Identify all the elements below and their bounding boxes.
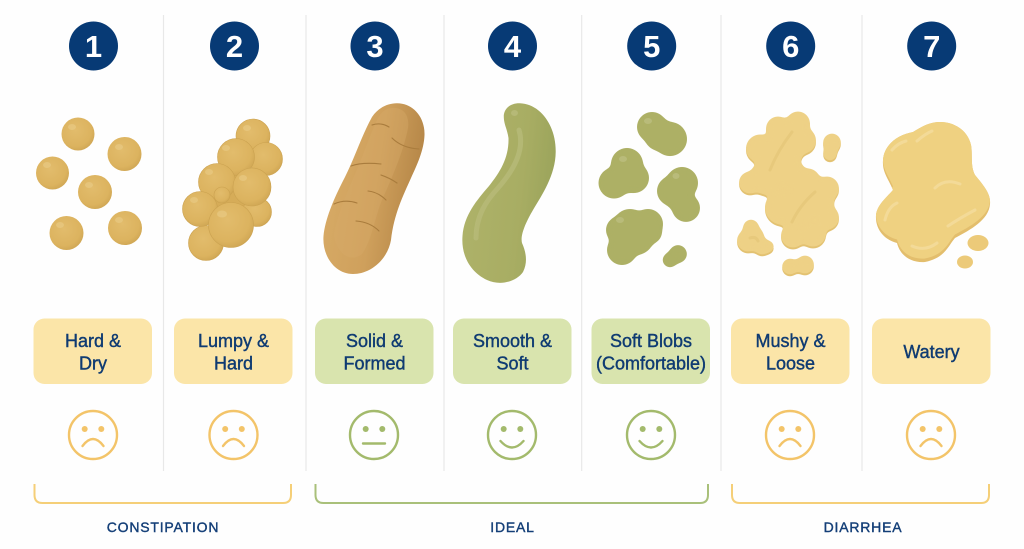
- icon: smiling face: [488, 411, 536, 459]
- illustration: formed sausage with cracks: [323, 103, 425, 274]
- number badge 4: 4: [504, 29, 522, 64]
- illustration: mushy fluffy pieces: [737, 112, 841, 276]
- number badge 5: 5: [643, 29, 660, 64]
- group: diarrhea bracket and label: [732, 484, 989, 535]
- number badge 3: [350, 22, 400, 70]
- number badge 5: [627, 22, 676, 70]
- group: constipation bracket and label: CONSTIPATION: [107, 519, 219, 535]
- label pill: Mushy & Loose: Loose: [766, 354, 815, 374]
- number badge 6: [766, 22, 815, 70]
- number badge 1: [69, 22, 118, 70]
- icon: sad face: [907, 411, 955, 459]
- number badge 2: 2: [226, 29, 243, 64]
- label pill: Solid & Formed: Solid &: [346, 331, 403, 351]
- label pill: Watery: [872, 318, 990, 384]
- label pill: Lumpy & Hard: [174, 318, 292, 384]
- number badge 7: [907, 22, 956, 70]
- illustration: smooth curved sausage: [462, 103, 556, 283]
- dividers between columns: [164, 15, 862, 471]
- panel: type 1: [34, 22, 152, 459]
- number badge 1: 1: [85, 29, 102, 64]
- number badge 7: 7: [923, 29, 940, 64]
- group: diarrhea bracket and label: DIARRHEA: [824, 519, 902, 535]
- label pill: Hard & Dry: Hard &: [65, 331, 121, 351]
- label pill: Solid & Formed: [315, 318, 434, 384]
- panel: type 7: [870, 22, 995, 459]
- label pill: Smooth & Soft: [453, 318, 572, 384]
- number badge 6: 6: [782, 29, 799, 64]
- label pill: Soft Blobs (Comfortable): (Comfortable): [596, 354, 706, 374]
- illustration: lumpy cluster: [182, 119, 282, 260]
- icon: smiling face: [627, 411, 675, 459]
- label pill: Soft Blobs (Comfortable): [592, 318, 710, 384]
- illustration: hard separate lumps: [36, 118, 142, 250]
- panel: type 2: [174, 22, 292, 459]
- icon: sad face: [210, 411, 258, 459]
- label pill: Lumpy & Hard: Lumpy &: [198, 331, 269, 351]
- icon: neutral face: [350, 411, 398, 459]
- group: ideal bracket and label: IDEAL: [490, 519, 535, 535]
- number badge 2: [210, 22, 259, 70]
- illustration: watery puddle: [876, 122, 990, 268]
- label pill: Smooth & Soft: Soft: [496, 354, 529, 374]
- illustration: soft blobs: [598, 112, 700, 268]
- label pill: Soft Blobs (Comfortable): Soft Blobs: [610, 331, 692, 351]
- label pill: Smooth & Soft: Smooth &: [473, 331, 552, 351]
- label pill: Mushy & Loose: Mushy &: [755, 331, 826, 351]
- icon: sad face: [766, 411, 814, 459]
- label pill: Solid & Formed: Formed: [343, 354, 406, 374]
- label pill: Hard & Dry: [34, 318, 152, 384]
- label pill: Hard & Dry: Dry: [79, 354, 107, 374]
- number badge 4: [488, 22, 537, 70]
- label pill: Watery: Watery: [903, 342, 960, 362]
- panel: type 3: [315, 22, 434, 459]
- number badge 3: 3: [366, 29, 384, 64]
- label pill: Lumpy & Hard: Hard: [214, 354, 253, 374]
- panel: type 6: [731, 22, 850, 459]
- label pill: Mushy & Loose: [731, 318, 850, 384]
- panel: type 4: [453, 22, 572, 459]
- icon: sad face: [69, 411, 117, 459]
- group: ideal bracket and label: [316, 484, 708, 535]
- group: constipation bracket and label: [34, 484, 291, 535]
- panel: type 5: [592, 22, 710, 459]
